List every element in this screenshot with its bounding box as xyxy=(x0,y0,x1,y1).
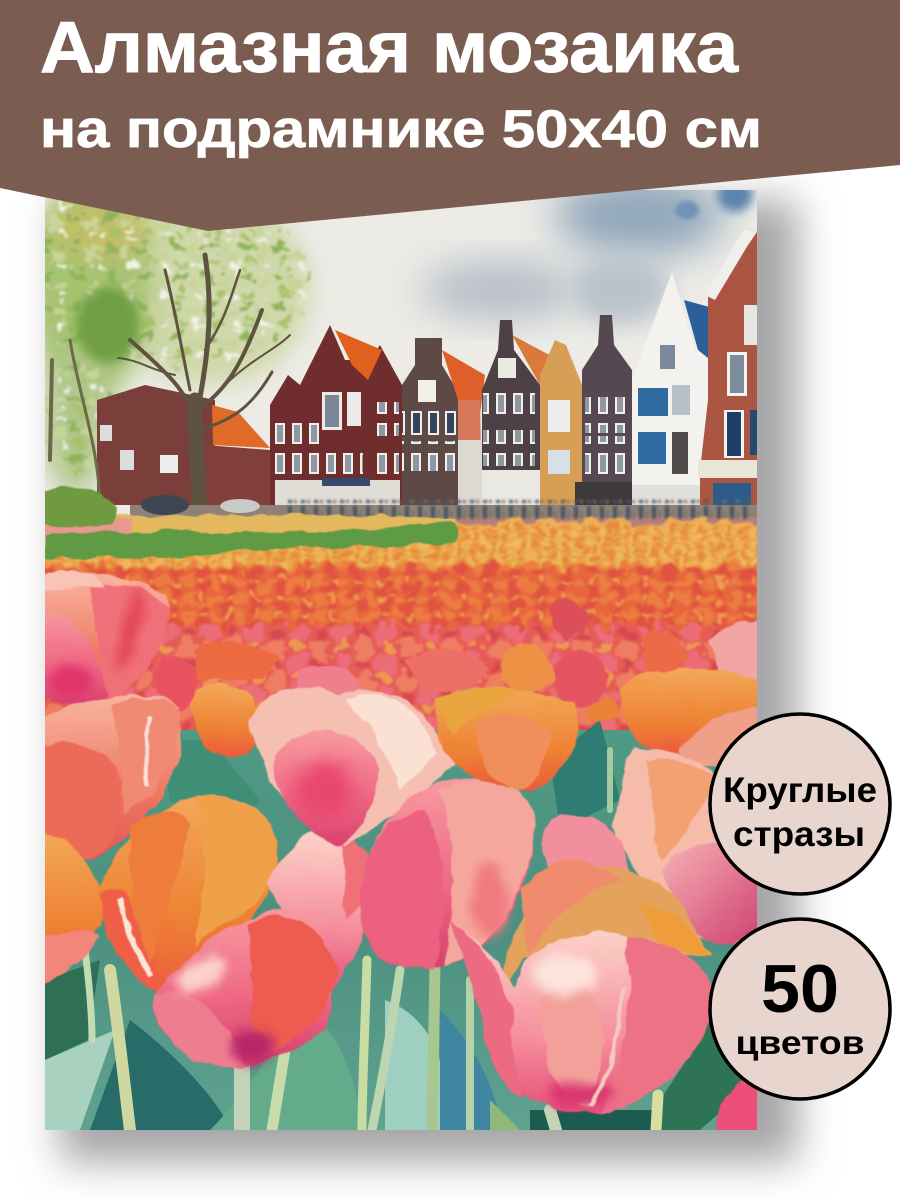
tulip: far right orange xyxy=(620,668,765,766)
house: dark narrow xyxy=(582,315,632,482)
house: yellow xyxy=(540,340,582,505)
house: dark gable xyxy=(482,320,540,470)
tulip: left orange xyxy=(45,834,104,984)
badge: round rhinestones: стразы xyxy=(733,815,865,854)
badge: round rhinestones xyxy=(710,714,890,894)
canvas drop shadow xyxy=(60,200,798,1162)
badge: 50 colours: цветов xyxy=(736,1024,864,1061)
tulip: orange centre right xyxy=(435,688,578,792)
badge: 50 colours: 50 xyxy=(761,951,839,1027)
tulip: front centre pink xyxy=(154,910,338,1068)
street with cars and people xyxy=(130,495,757,528)
tulip: bottom right corner pink xyxy=(716,1080,757,1130)
stems and leaves background xyxy=(45,720,757,1130)
canal houses xyxy=(97,228,757,525)
house: white gable xyxy=(632,272,688,485)
house: right brick xyxy=(700,228,757,525)
mid-field tulips xyxy=(152,600,765,757)
house: orange roof xyxy=(215,446,270,505)
tulip: tan petals behind front tulip xyxy=(500,861,712,990)
title: line two: на подрамнике 50х40 см xyxy=(40,100,762,159)
badge: 50 colours xyxy=(710,919,890,1099)
tulip: right pink magenta xyxy=(543,745,765,944)
distant tulip field xyxy=(30,522,770,747)
house: red brick row xyxy=(270,325,402,505)
house: far left brick xyxy=(97,385,215,505)
tulip: pink right-leaning xyxy=(266,830,369,991)
badge: round rhinestones: Круглые xyxy=(723,771,877,810)
tree foliage xyxy=(30,180,310,495)
tulip: top left pink xyxy=(45,569,170,708)
house: grey brown xyxy=(402,338,458,505)
tulip: front right pink xyxy=(450,920,715,1114)
tree trunk and branches xyxy=(50,255,290,515)
tulip: centre pink white xyxy=(250,687,455,848)
tulip: orange peach xyxy=(100,795,278,995)
all foreground tulips xyxy=(38,570,765,1140)
tulip: left salmon xyxy=(38,696,183,860)
sky xyxy=(45,190,757,528)
title: line one: Алмазная мозаика xyxy=(40,8,739,88)
painting: Amsterdam tulip field xyxy=(30,173,770,1140)
green bush xyxy=(40,487,116,526)
green hedge and flower bed xyxy=(40,514,459,560)
tulip: centre big pink xyxy=(360,779,535,969)
title banner xyxy=(0,0,900,231)
